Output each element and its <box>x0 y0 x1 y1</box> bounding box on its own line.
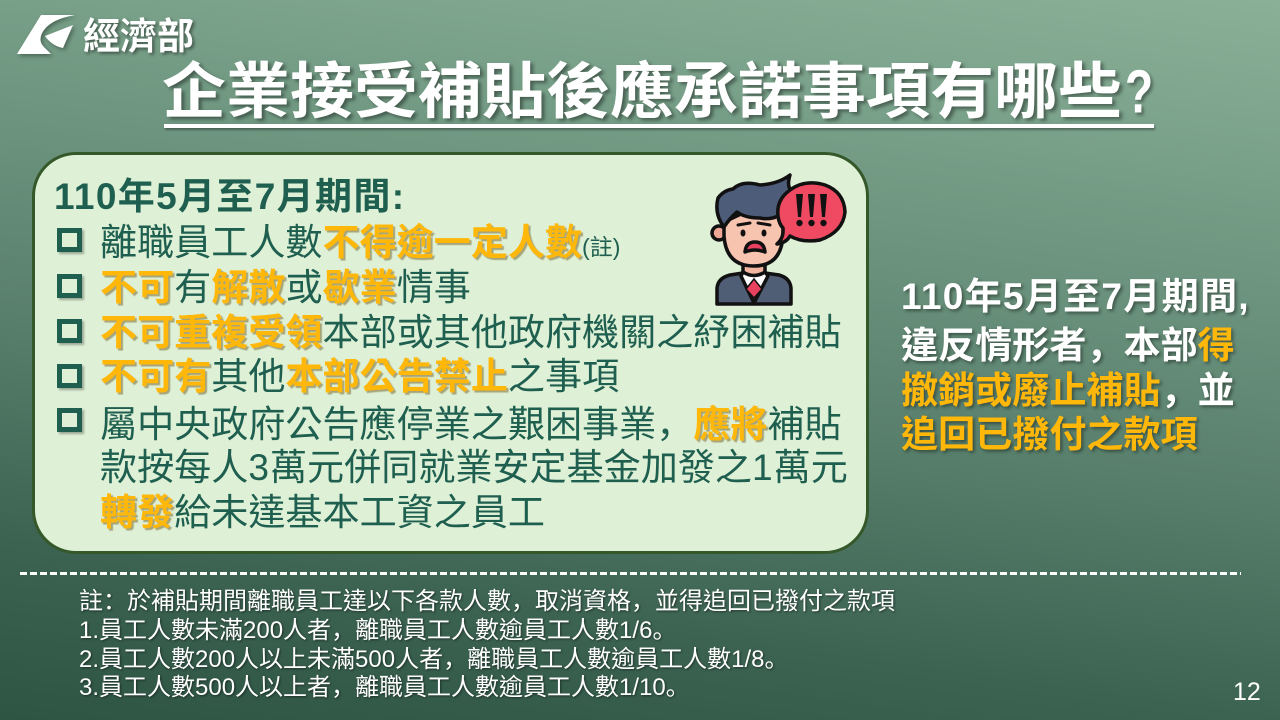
ear <box>712 226 726 240</box>
item 1 checkbox <box>57 228 82 252</box>
speech bubble <box>777 183 845 244</box>
jacket <box>717 273 791 304</box>
icon: ministry logo <box>17 14 76 58</box>
item 5 line 2: 款按每人3萬元併同就業安定基金加發之1萬元 <box>100 446 848 488</box>
item 3 checkbox <box>57 319 82 343</box>
panel: commitments <box>32 152 869 554</box>
footnote heading: 註：於補貼期間離職員工達以下各款人數，取消資格，並得追回已撥付之款項 <box>79 581 895 616</box>
face <box>724 205 783 266</box>
hair <box>717 175 793 227</box>
panel background <box>32 152 869 554</box>
eyes <box>740 230 766 236</box>
side note line 4: 追回已撥付之款項 <box>901 413 1198 455</box>
title: 企業接受補貼後應承諾事項有哪些 <box>162 57 1122 126</box>
item 5 line 3: 轉發給未達基本工資之員工 <box>100 491 545 533</box>
item 2: 不可有解散或歇業情事 <box>100 266 471 308</box>
panel heading: 110年5月至7月期間: <box>54 176 405 217</box>
exclamation marks <box>796 194 827 226</box>
item 4 checkbox <box>57 364 82 388</box>
side note line 1: 110年5月至7月期間, <box>901 275 1250 317</box>
footnote 1: 1.員工人數未滿200人者，離職員工人數逾員工人數1/6。 <box>79 610 676 645</box>
logo: ministry mark and name <box>17 14 196 58</box>
footnote <box>79 581 896 702</box>
tie <box>746 279 762 298</box>
footnote 3: 3.員工人數500人以上者，離職員工人數逾員工人數1/10。 <box>79 667 690 702</box>
shirt and collar <box>741 272 768 303</box>
title: ? <box>1125 57 1153 126</box>
page number: 12 <box>1233 678 1261 706</box>
dashed divider <box>20 572 1241 575</box>
eyebrows <box>738 223 770 225</box>
footnote 2: 2.員工人數200人以上未滿500人者，離職員工人數逾員工人數1/8。 <box>79 639 788 674</box>
side note <box>901 275 1250 455</box>
title underline <box>164 124 1154 128</box>
item 1: 離職員工人數不得逾一定人數(註) <box>100 221 620 263</box>
side note line 3: 撤銷或廢止補貼，並 <box>901 360 1235 414</box>
item 5 line 1: 屬中央政府公告應停業之艱困事業，應將補貼 <box>100 394 842 448</box>
side note line 2: 違反情形者，本部得 <box>901 315 1235 369</box>
item 2 checkbox <box>57 274 82 298</box>
icon: worried man with exclamation speech bubble <box>710 173 847 306</box>
neck <box>743 262 765 276</box>
item 3: 不可重複受領本部或其他政府機關之紓困補貼 <box>100 311 842 353</box>
ministry name: 經濟部 <box>83 16 194 57</box>
item 5 checkbox <box>57 408 82 432</box>
mouth <box>745 242 765 252</box>
item 4: 不可有其他本部公告禁止之事項 <box>100 355 619 397</box>
